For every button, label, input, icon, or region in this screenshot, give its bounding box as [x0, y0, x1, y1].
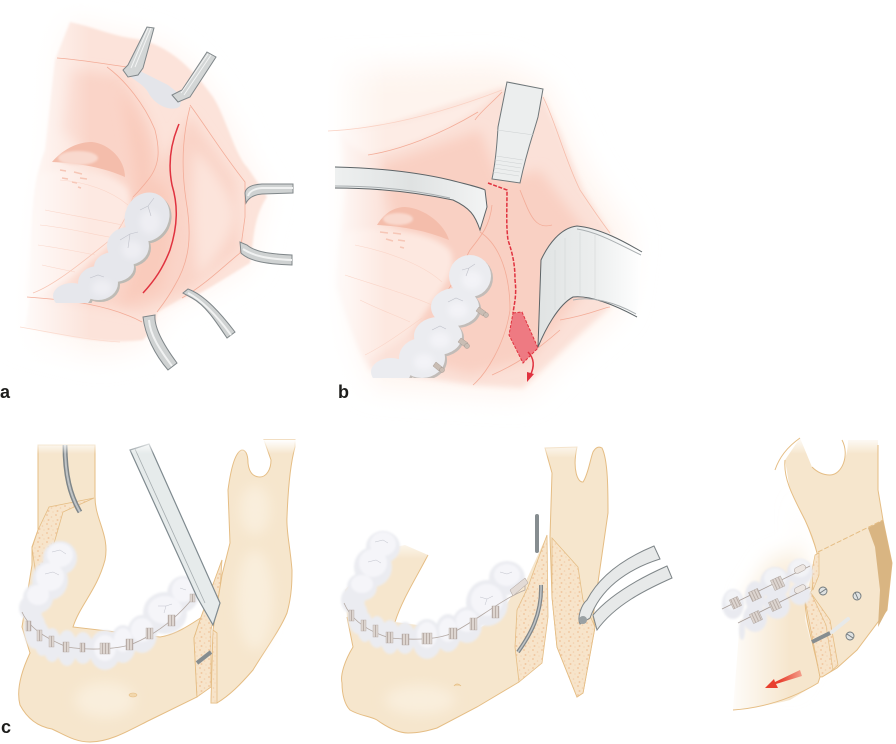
panel a: oral incision view — [20, 22, 294, 371]
panel c: mandible step 2 — [341, 440, 672, 733]
bone highlight c2 — [385, 685, 455, 715]
teeth b — [371, 255, 493, 388]
dome fold b — [377, 207, 449, 248]
braces c3 — [722, 564, 810, 624]
cut face lower — [194, 560, 222, 697]
top fade c2 — [540, 440, 585, 458]
label b: b — [338, 382, 349, 402]
tissue folds a — [20, 58, 245, 342]
pin c2 — [535, 516, 539, 551]
soft tissue b — [328, 65, 630, 395]
dome fold a — [52, 142, 125, 188]
left white mask a — [0, 0, 12, 360]
curved saw c2 — [518, 585, 541, 652]
tan side strip — [868, 520, 892, 627]
dashed cut line c3 — [818, 520, 883, 552]
proximal fragment c2 — [545, 447, 608, 697]
ramus fade c2 — [395, 535, 435, 559]
bone outline c3 — [733, 438, 892, 710]
panel c: mandible step 1 — [19, 440, 295, 742]
cut bone block — [509, 312, 538, 363]
panel b: osteotomy line view — [328, 66, 642, 394]
braces c1 — [22, 594, 195, 654]
ramus and body c3 — [733, 438, 892, 710]
dashed osteotomy line — [488, 183, 516, 313]
teeth c3 — [722, 559, 813, 640]
body outline c2 — [342, 555, 519, 733]
bone highlights — [75, 485, 273, 718]
left fade a — [12, 0, 90, 360]
braces c2 — [344, 578, 528, 645]
proximal fragment — [211, 440, 295, 703]
bracket pegs b — [433, 307, 488, 372]
top fade c3 — [775, 436, 885, 454]
label a: a — [0, 382, 11, 402]
retractor left b — [335, 167, 487, 230]
retractor right b — [538, 226, 642, 347]
osteotome c1 — [130, 444, 220, 625]
screws c3 — [819, 587, 861, 640]
cut section upper c3 — [812, 553, 819, 590]
retractor hook 1 — [245, 184, 293, 203]
retractor hook 2 — [240, 242, 292, 265]
forceps c1 — [65, 445, 80, 512]
panel c: mandible step 3 — [722, 436, 892, 715]
tissue folds b — [328, 90, 610, 385]
mandible body c2 — [342, 535, 548, 733]
section c2 — [552, 538, 595, 697]
cut face c2 — [515, 535, 548, 682]
left fade b — [326, 40, 386, 410]
label c: c — [1, 717, 11, 737]
forceps c2 — [579, 546, 672, 630]
retractor top b — [492, 82, 543, 183]
mental foramen c2 — [454, 684, 461, 686]
teeth c1 — [19, 541, 199, 670]
teeth c2 — [341, 531, 525, 659]
left white mask b — [295, 40, 326, 410]
mental foramen — [129, 693, 137, 697]
cut face upper — [32, 498, 94, 575]
retractor hook 4 — [143, 315, 177, 370]
bone glow c3 — [745, 490, 815, 690]
arrow b — [527, 352, 534, 382]
bar c1 — [197, 652, 211, 663]
bar c3 — [812, 619, 848, 642]
left fade c3 — [725, 600, 790, 715]
top fade c1 — [30, 440, 300, 454]
red arrow c3 — [765, 670, 802, 688]
teeth a — [53, 192, 172, 303]
soft tissue a — [20, 22, 267, 355]
cut section lower c3 — [805, 593, 838, 677]
top forceps — [123, 27, 216, 109]
mandible body and ramus — [19, 445, 222, 742]
retractor hook 3 — [183, 289, 235, 338]
section strip — [211, 630, 217, 703]
incision line — [143, 124, 179, 293]
